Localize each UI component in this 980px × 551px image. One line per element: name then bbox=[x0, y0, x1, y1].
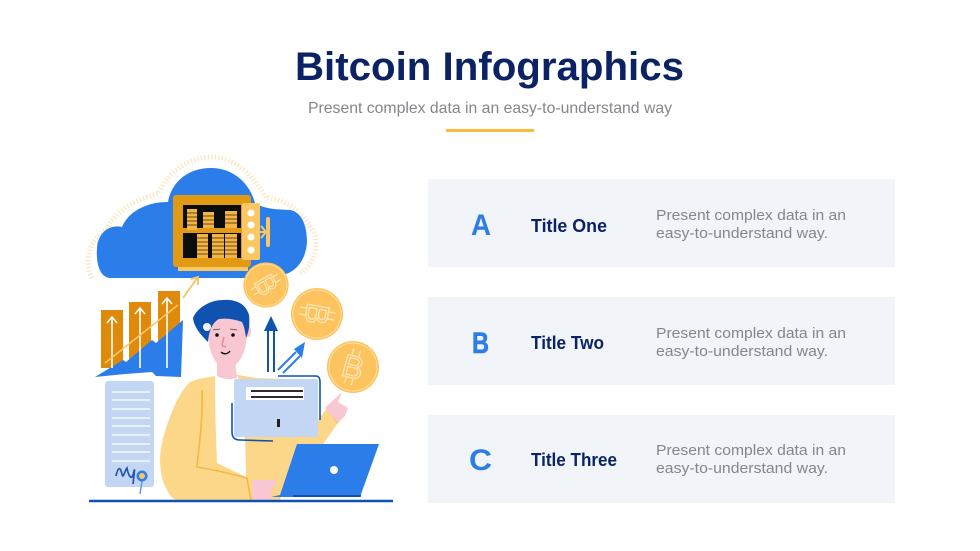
panel: item B bbox=[428, 297, 895, 385]
bitcoin coin 1: B bbox=[248, 269, 284, 301]
title: Bitcoin Infographics bbox=[295, 45, 684, 89]
upward arrows bbox=[264, 316, 305, 373]
accent underline bbox=[446, 129, 534, 132]
description A: easy-to-understand way. bbox=[656, 225, 828, 242]
description C: Present complex data in an bbox=[656, 442, 846, 459]
bitcoin coin 1 bbox=[235, 254, 297, 316]
desk line bbox=[89, 500, 393, 502]
panel: item A bbox=[428, 179, 895, 267]
illustration: bitcoin cloud and person bbox=[88, 157, 393, 502]
document certificate bbox=[105, 381, 154, 494]
dotted halo around cloud bbox=[88, 157, 316, 278]
description B: easy-to-understand way. bbox=[656, 343, 828, 360]
bitcoin coin 3 bbox=[321, 335, 385, 399]
letter B: B bbox=[472, 327, 489, 360]
letter A: A bbox=[471, 209, 491, 242]
panel: item C bbox=[428, 415, 895, 503]
bitcoin coin 2 bbox=[287, 284, 347, 344]
subtitle: Present complex data in an easy-to-understand way bbox=[308, 100, 672, 117]
heading: Title Three: Title Three bbox=[531, 450, 617, 470]
heading: Title One: Title One bbox=[531, 216, 607, 236]
description A: Present complex data in an bbox=[656, 207, 846, 224]
person bbox=[160, 300, 348, 502]
letter C: C bbox=[469, 444, 492, 477]
coin stacks bbox=[187, 209, 237, 258]
description B: Present complex data in an bbox=[656, 325, 846, 342]
bitcoin coin 2: B bbox=[297, 300, 337, 328]
bar chart with upward arrows bbox=[95, 277, 198, 377]
heading: Title Two: Title Two bbox=[531, 333, 604, 353]
description C: easy-to-understand way. bbox=[656, 460, 828, 477]
laptop bbox=[271, 444, 379, 497]
tablet bbox=[232, 376, 320, 441]
vault safe bbox=[173, 195, 270, 271]
bitcoin coin 3: B bbox=[338, 347, 368, 387]
cloud bbox=[97, 168, 307, 278]
